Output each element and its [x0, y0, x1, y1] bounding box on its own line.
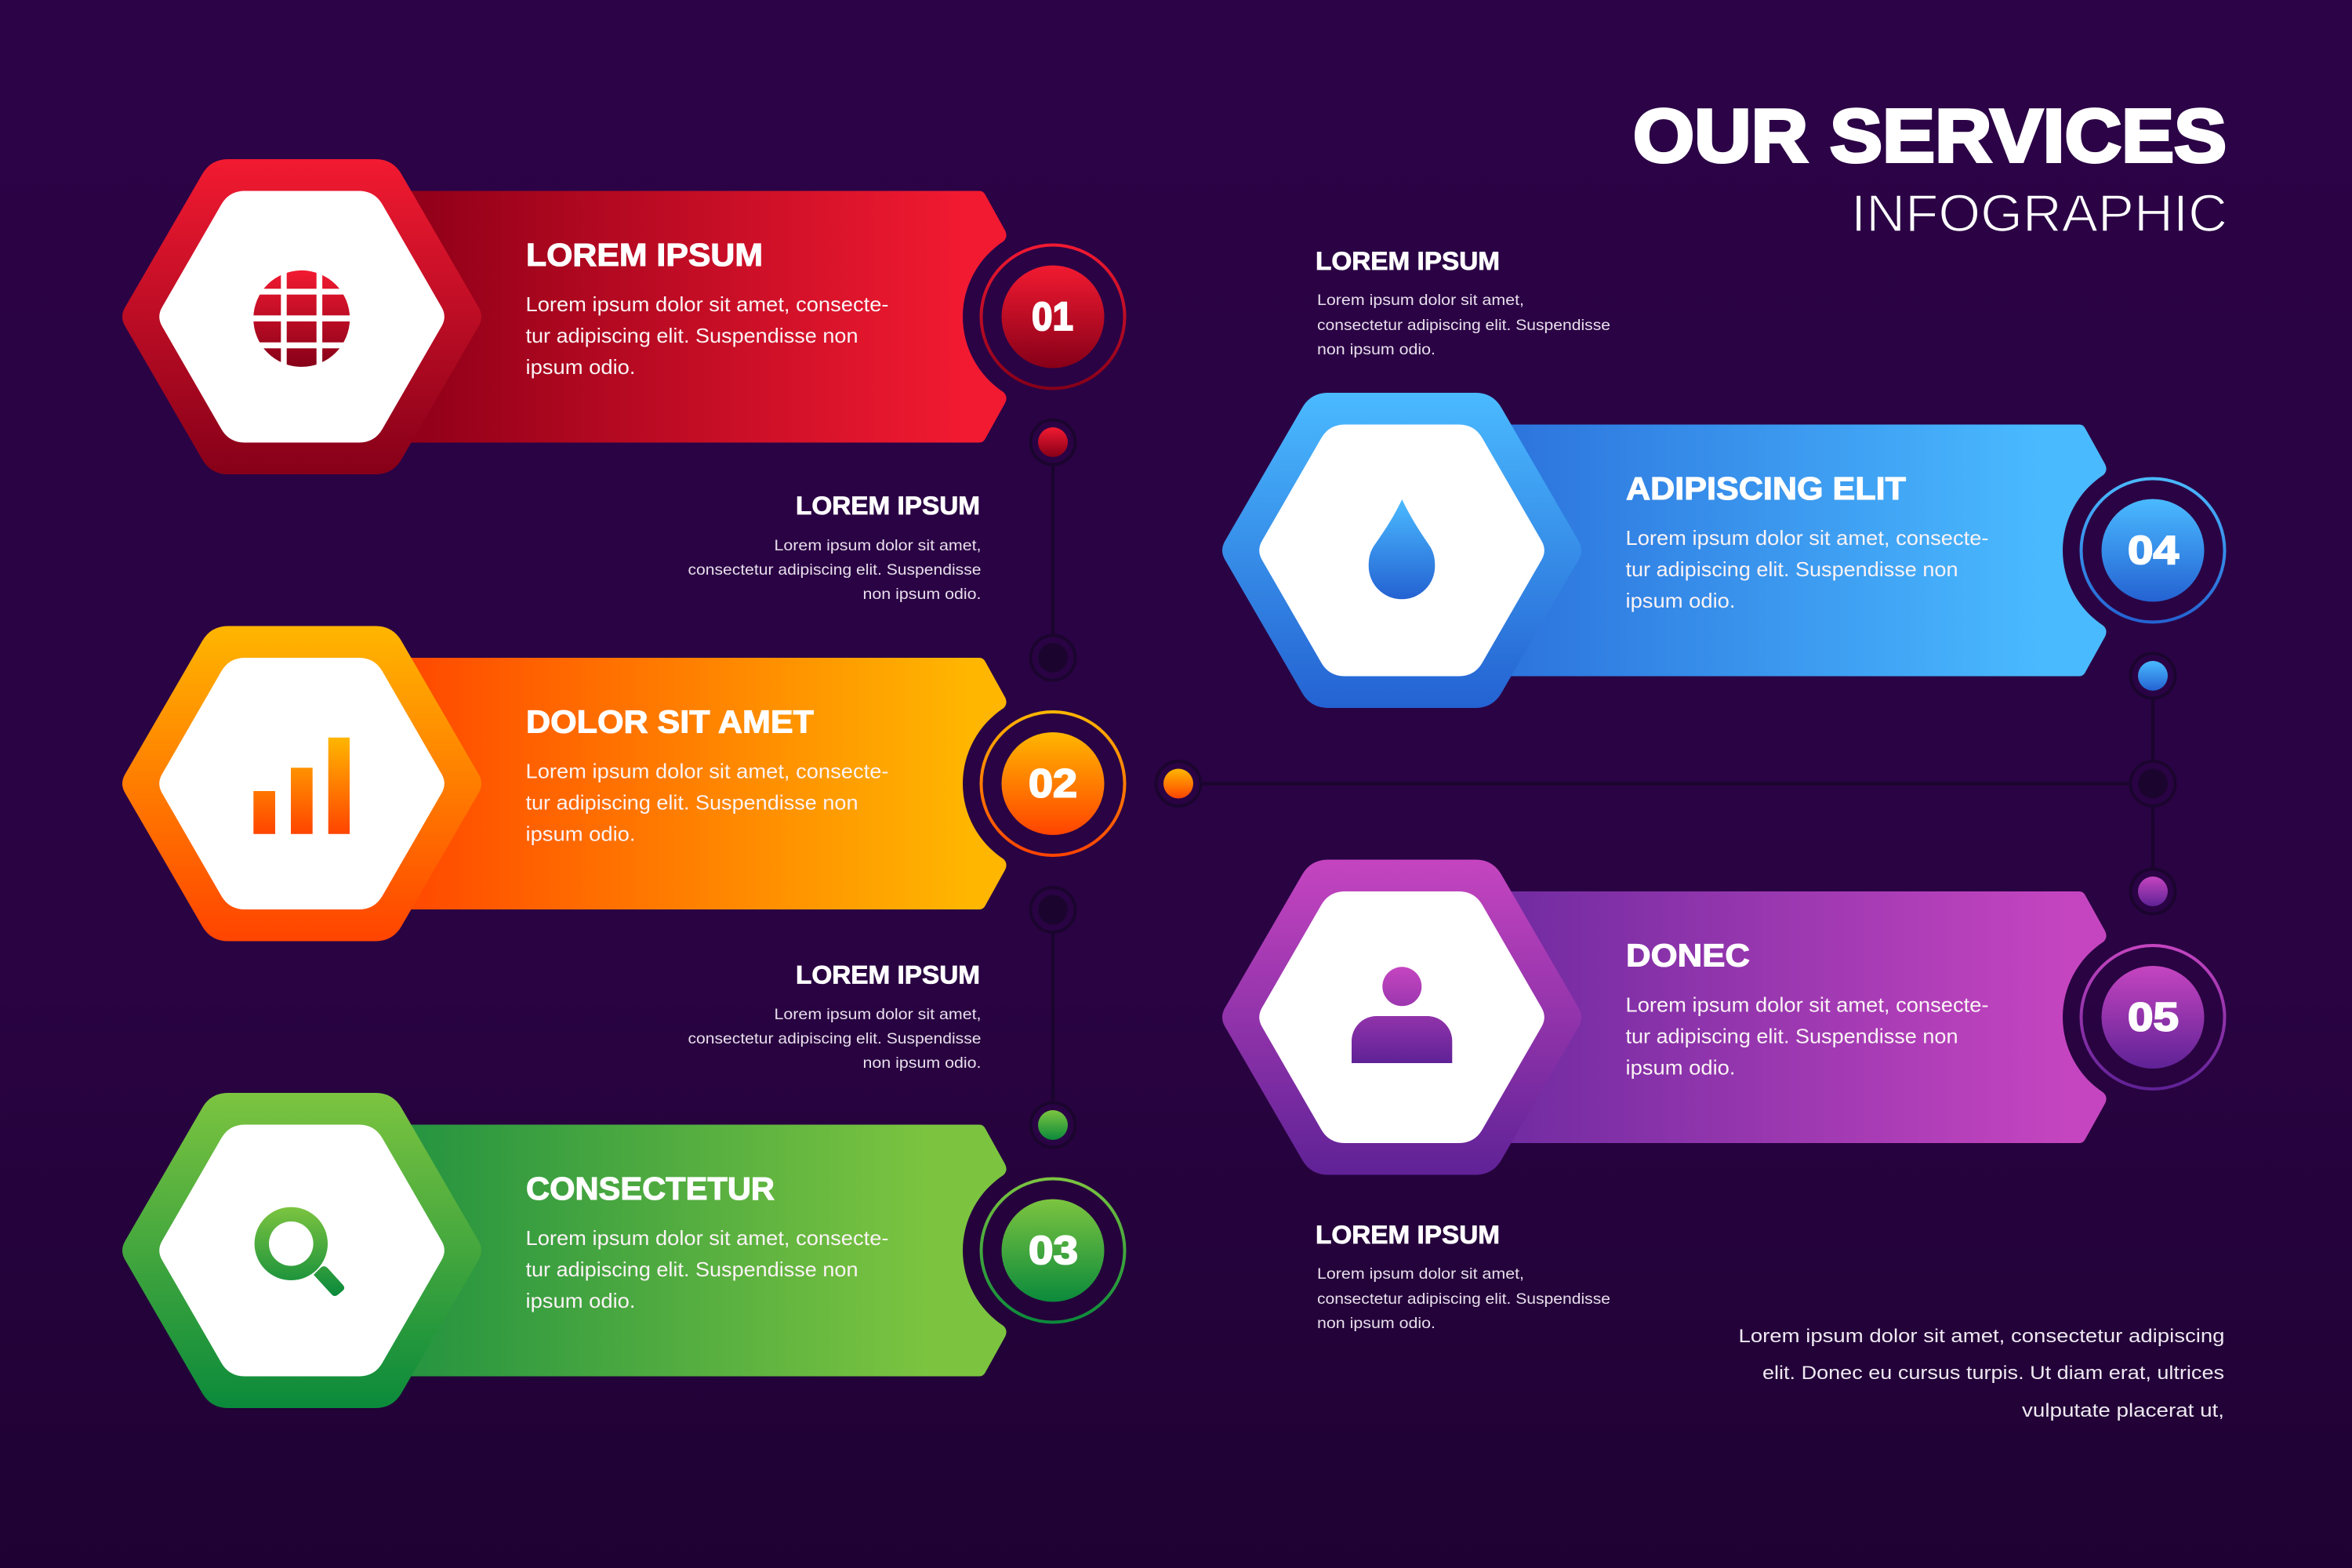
card body text: Lorem ipsum dolor sit amet, consecte- — [1626, 526, 1988, 550]
connector node: dark lower — [1030, 887, 1076, 932]
text block: between 02 and 03: consectetur adipiscing elit. Suspendisse — [688, 1030, 982, 1047]
connector lines — [1053, 463, 2153, 1104]
number ring — [982, 245, 1124, 389]
band — [380, 658, 1007, 909]
connector node: purple — [2131, 869, 2175, 914]
card body text: ipsum odio. — [525, 822, 635, 845]
connector node: orange — [1156, 761, 1201, 806]
card body text: Lorem ipsum dolor sit amet, consecte- — [525, 759, 889, 782]
card body text: tur adipiscing elit. Suspendisse non — [525, 790, 858, 814]
band — [1480, 425, 2107, 676]
number: 02 — [1029, 760, 1077, 806]
title: INFOGRAPHIC — [1851, 184, 2227, 243]
text block: footer paragraph — [1739, 1326, 2225, 1421]
card body text: tur adipiscing elit. Suspendisse non — [525, 324, 858, 347]
number: 01 — [1032, 294, 1073, 339]
connector node: dark right — [2131, 761, 2175, 806]
text block: below 05: LOREM IPSUM — [1316, 1221, 1500, 1249]
number disc — [1002, 265, 1104, 368]
card body text: tur adipiscing elit. Suspendisse non — [1626, 1024, 1958, 1047]
panel: service 04 — [1222, 393, 2225, 708]
text block: top right: non ipsum odio. — [1317, 341, 1436, 358]
hexagon frame — [122, 159, 481, 474]
hexagon white centre — [159, 1124, 445, 1377]
card heading: DONEC — [1626, 938, 1750, 974]
number disc — [2101, 966, 2205, 1069]
card heading: DOLOR SIT AMET — [526, 704, 814, 740]
card heading: LOREM IPSUM — [526, 237, 763, 273]
connector node: green — [1030, 1102, 1076, 1148]
text block: between 01 and 02: consectetur adipiscing elit. Suspendisse — [688, 561, 982, 579]
text block: top right: consectetur adipiscing elit. Suspendisse — [1317, 317, 1610, 334]
text block: between 02 and 03 — [688, 961, 982, 1072]
text block: between 01 and 02: LOREM IPSUM — [796, 492, 980, 520]
text block: top right: LOREM IPSUM — [1316, 247, 1500, 275]
connector node: red — [1030, 420, 1076, 464]
text block: below 05: non ipsum odio. — [1317, 1315, 1436, 1332]
text block: between 02 and 03: LOREM IPSUM — [796, 961, 980, 989]
card body text: tur adipiscing elit. Suspendisse non — [1626, 557, 1958, 581]
panel: service 02 — [122, 626, 1124, 941]
card body text — [525, 292, 889, 379]
connector node: blue — [2131, 654, 2175, 698]
panel: service 03 — [122, 1093, 1124, 1408]
card body text: Lorem ipsum dolor sit amet, consecte- — [525, 1226, 889, 1250]
card body text: ipsum odio. — [1626, 589, 1736, 612]
text block: between 01 and 02: non ipsum odio. — [862, 586, 982, 603]
card body text — [1626, 526, 1988, 612]
number: 03 — [1029, 1228, 1078, 1272]
text block: top right: Lorem ipsum dolor sit amet, — [1317, 292, 1524, 309]
card body text — [525, 759, 889, 845]
text block: footer paragraph: elit. Donec eu cursus turpis. Ut diam erat, ultrices — [1762, 1363, 2224, 1384]
number: 05 — [2128, 994, 2179, 1040]
card body text — [525, 1226, 889, 1312]
text block: below 05: Lorem ipsum dolor sit amet, — [1317, 1265, 1524, 1283]
hexagon white centre — [1259, 891, 1544, 1143]
card body text: Lorem ipsum dolor sit amet, consecte- — [1626, 993, 1988, 1016]
number ring — [982, 712, 1124, 855]
number ring — [982, 1179, 1124, 1322]
connector node: dark upper — [1030, 635, 1076, 681]
panel: service 01 — [122, 159, 1124, 474]
number disc — [2101, 499, 2205, 602]
hexagon frame — [122, 626, 481, 941]
text block: between 01 and 02 — [688, 492, 982, 603]
card body text: ipsum odio. — [525, 355, 635, 379]
number disc — [1002, 732, 1104, 835]
text block: between 02 and 03: non ipsum odio. — [862, 1054, 982, 1072]
hexagon white centre — [159, 658, 445, 909]
title — [1633, 94, 2227, 243]
card body text — [1626, 993, 1988, 1079]
panel: service 05 — [1222, 859, 2225, 1174]
text block: below 05: consectetur adipiscing elit. Suspendisse — [1317, 1290, 1610, 1308]
card body text: Lorem ipsum dolor sit amet, consecte- — [525, 292, 889, 316]
icon: person — [1352, 967, 1452, 1063]
icon: globe — [252, 268, 352, 370]
title: OUR SERVICES — [1633, 94, 2227, 178]
number ring — [2081, 478, 2225, 622]
hexagon frame — [122, 1093, 481, 1408]
text block: footer paragraph: Lorem ipsum dolor sit amet, consectetur adipiscing — [1739, 1326, 2225, 1347]
text block: between 02 and 03: Lorem ipsum dolor sit amet, — [775, 1006, 982, 1023]
card body text: ipsum odio. — [525, 1289, 635, 1312]
hexagon frame — [1222, 859, 1581, 1174]
text block: between 01 and 02: Lorem ipsum dolor sit amet, — [775, 537, 982, 554]
icon: magnifying glass — [255, 1207, 344, 1296]
icon: water drop — [1369, 499, 1435, 599]
text block: footer paragraph: vulputate placerat ut, — [2022, 1400, 2224, 1421]
band — [380, 1124, 1007, 1377]
hexagon white centre — [1259, 425, 1544, 676]
number ring — [2081, 946, 2225, 1089]
band — [380, 191, 1007, 442]
number: 04 — [2128, 528, 2180, 572]
card body text: tur adipiscing elit. Suspendisse non — [525, 1258, 858, 1281]
number disc — [1002, 1200, 1104, 1301]
card heading: ADIPISCING ELIT — [1626, 470, 1906, 506]
icon: bar chart — [253, 738, 350, 834]
card heading: CONSECTETUR — [526, 1171, 775, 1207]
hexagon white centre — [159, 191, 445, 442]
text block: top right — [1316, 247, 1610, 358]
text block: below 05 — [1316, 1221, 1610, 1332]
card body text: ipsum odio. — [1626, 1055, 1736, 1079]
hexagon frame — [1222, 393, 1581, 708]
band — [1480, 891, 2107, 1143]
